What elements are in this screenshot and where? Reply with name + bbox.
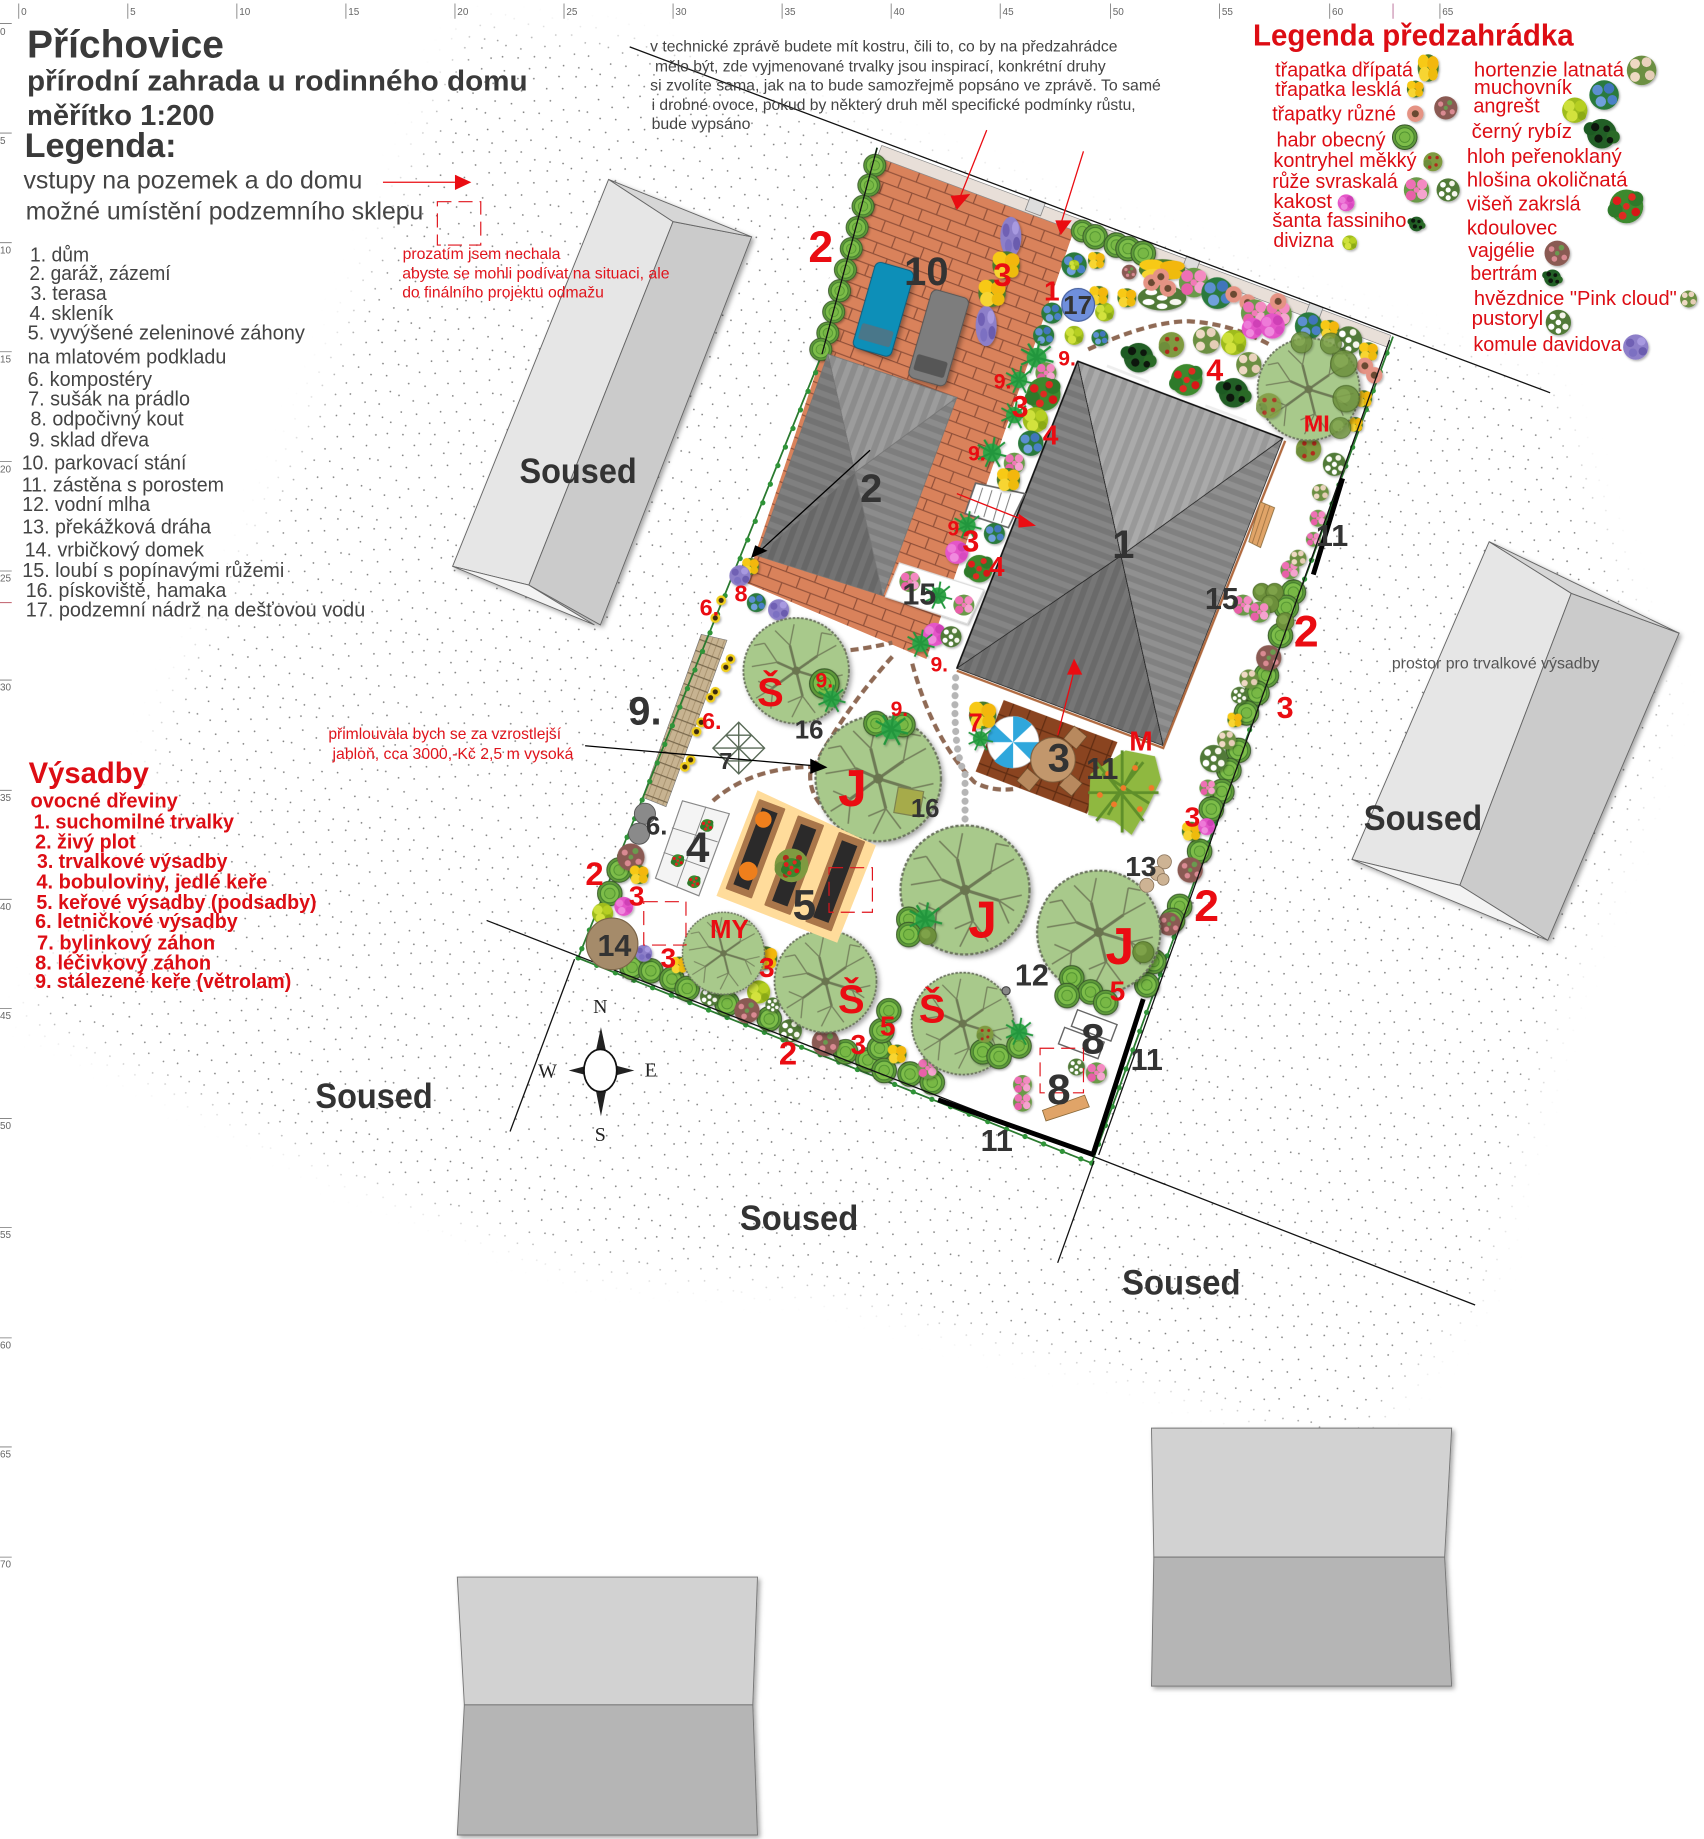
front garden planting: [1117, 259, 1382, 432]
neighbour building: upper left: [453, 179, 752, 625]
front garden legend: left column: růže svraskalá: [1272, 170, 1398, 193]
ruler: top: 20: [457, 7, 469, 18]
red note about cellar: abyste se mohli podívat na situaci, ale: [402, 265, 670, 282]
cars: [852, 261, 970, 387]
vegetable area mulch: [716, 790, 876, 943]
plan numbers: red: 3: [759, 952, 775, 983]
ruler: left: 0: [0, 27, 6, 38]
front garden legend: right column: bertrám: [1470, 262, 1537, 285]
plan numbers: dark: [597, 250, 1348, 1158]
terrace umbrella: [987, 716, 1039, 768]
plan numbers: dark: 3: [1048, 737, 1070, 781]
planting list: 5. keřové výsadby (podsadby): [36, 891, 317, 914]
red note about apple tree: jabloň, cca 3000,-Kč 2,5 m vysoká: [332, 746, 574, 763]
front garden legend: right column: pustoryl: [1472, 307, 1543, 330]
plan numbers: red: Š: [757, 669, 784, 715]
planting list: 8. léčivkový záhon: [35, 952, 211, 975]
plan numbers: dark: 9.: [628, 690, 662, 734]
stippled surroundings: [22, 14, 1674, 1428]
ruler: top: 50: [1113, 7, 1124, 18]
shrubs under trees: [810, 669, 1154, 1069]
front garden legend: left column: kontryhel měkký: [1273, 149, 1417, 172]
plan numbers: dark: 12: [1015, 959, 1049, 993]
front garden legend: left column: třapatka lesklá: [1275, 78, 1402, 101]
legend heading: Legenda:: [25, 127, 176, 165]
plan numbers: dark: 17: [1063, 292, 1092, 320]
neighbour labels: Soused: [1122, 1263, 1241, 1302]
plan numbers: red: 3: [962, 525, 979, 559]
fruit trees: [682, 338, 1360, 1075]
plan numbers: red: Š: [919, 986, 946, 1032]
plan numbers: red: 5: [880, 1010, 895, 1041]
plan numbers: red: 9: [947, 517, 959, 540]
plot ground: [578, 145, 1393, 1163]
water mist: [1002, 987, 1010, 995]
red entrance arrows: [383, 130, 1083, 735]
note about technical report: [650, 39, 1161, 133]
ruler: left: 60: [0, 1340, 12, 1351]
note about technical report: si zvolíte sama, jak na to bude samozřejmě popsáno ve zprávě. To samé: [650, 77, 1161, 94]
black pointer arrows: [585, 450, 870, 774]
plan numbers: red: 9.: [1058, 347, 1076, 370]
neighbour labels: Soused: [315, 1077, 433, 1116]
plan numbers: red: MY: [710, 916, 749, 944]
plan numbers: dark: 14: [597, 929, 631, 963]
front garden legend: left column: [1272, 59, 1417, 252]
neighbour building: bottom right: [1151, 1428, 1452, 1686]
note about technical report: v technické zprávě budete mít kostru, čili to, co by na předzahrádce: [650, 39, 1118, 56]
ruler: left: 30: [0, 683, 12, 694]
street wall: [877, 145, 1391, 347]
plan numbers: red: 2: [1294, 607, 1319, 656]
note about technical report: bude vypsáno: [652, 116, 751, 133]
plan numbers: dark: 2: [860, 467, 882, 511]
plan numbers: dark: 5: [793, 882, 816, 929]
numbered list: 13. překážková dráha: [22, 515, 212, 538]
house roof: [957, 361, 1285, 748]
plan numbers: red: 9.: [816, 670, 833, 693]
numbered list: 14. vrbičkový domek: [25, 538, 205, 561]
red note about cellar: do finálního projektu odmažu: [402, 285, 604, 302]
planting list: 2. živý plot: [35, 830, 136, 853]
ruler: top: 35: [784, 7, 796, 18]
note about perennial planting: prostor pro trvalkové výsadby: [1392, 655, 1599, 672]
front garden legend: left column: habr obecný: [1276, 129, 1386, 152]
numbered list: 5. vyvýšené zeleninové záhony: [28, 322, 306, 345]
plan numbers: red: 9.: [968, 442, 986, 465]
plan numbers: red: M: [1129, 726, 1153, 757]
neighbour labels: Soused: [1364, 799, 1482, 838]
note about technical report: i drobné ovoce, pokud by některý druh měl specifické podmínky růstu,: [652, 96, 1136, 114]
neighbour labels: Soused: [740, 1199, 858, 1238]
planting list: 7. bylinkový záhon: [37, 932, 215, 955]
front garden legend: left column: divizna: [1273, 229, 1334, 252]
pergola with roses: [885, 563, 1270, 624]
plan numbers: red: 3: [851, 1029, 866, 1060]
ruler: left: 70: [0, 1560, 12, 1571]
ruler: left: 55: [0, 1230, 12, 1241]
ruler: left: 5: [0, 136, 6, 147]
plan numbers: red: 1: [1044, 275, 1060, 306]
numbered list: 7. sušák na prádlo: [28, 388, 190, 411]
compass rose: W: [538, 1061, 557, 1083]
plan numbers: dark: 15: [902, 577, 936, 611]
planting list: 3. trvalkové výsadby: [37, 850, 228, 873]
front garden legend: plant icons: [1338, 54, 1697, 360]
numbered list: 2. garáž, zázemí: [29, 262, 171, 285]
front garden legend: right column: angrešt: [1473, 95, 1540, 118]
numbered list: 9. sklad dřeva: [29, 428, 149, 451]
fence posts: [578, 337, 1393, 1163]
plan numbers: red: J: [838, 759, 867, 817]
roof windows: [1107, 366, 1246, 421]
plan numbers: red: 3: [661, 942, 676, 973]
plan numbers: dark: 8: [1047, 1066, 1071, 1113]
ruler: top: 15: [348, 7, 360, 18]
plan numbers: dark: 11: [1131, 1043, 1163, 1077]
plan numbers: red: 9.: [994, 371, 1011, 394]
ruler: left: 15: [0, 354, 12, 365]
numbered list: na mlatovém podkladu: [28, 345, 226, 368]
planting list: ovocné dřeviny: [30, 789, 178, 812]
plan numbers: dark: 1: [1112, 523, 1134, 567]
ruler: left: 50: [0, 1121, 12, 1132]
planting over the rowan tree: [1256, 332, 1359, 439]
planting list: 4. bobuloviny, jedlé keře: [36, 870, 267, 893]
screens with climbers: [938, 478, 1343, 1155]
front garden legend: left column: třapatky různé: [1272, 103, 1396, 126]
compost bins: [629, 803, 655, 844]
ruler: top: [19, 4, 1454, 19]
neighbour labels: Soused: [519, 452, 637, 491]
compass rose: E: [645, 1060, 657, 1082]
ruler: top: 5: [130, 7, 136, 18]
small herb and medicinal beds: [680, 558, 996, 772]
plan numbers: dark: 10: [904, 250, 949, 294]
obstacle course logs: [1140, 855, 1171, 892]
ruler: left: 35: [0, 793, 12, 804]
red note about cellar: [402, 246, 670, 302]
border planting: [592, 436, 1346, 1112]
front garden legend: right column: hlošina okoličnatá: [1467, 168, 1628, 191]
front garden legend: right column: hloh peřenoklaný: [1467, 145, 1622, 168]
numbered list: 4. skleník: [29, 302, 114, 325]
note about technical report: mělo být, zde vyjmenované trvalky jsou inspirací, konkrétní druhy: [655, 59, 1106, 76]
front garden legend: right column: hortenzie latnatá: [1474, 59, 1625, 82]
numbered list: 15. loubí s popínavými růžemi: [22, 559, 284, 582]
ruler: top: 10: [239, 7, 251, 18]
compass rose: [538, 996, 657, 1146]
boundary lines: [487, 47, 1550, 1305]
terrace table and chairs: [1017, 726, 1087, 796]
dashed cellar placements: [437, 202, 1083, 1093]
plan numbers: red: 6.: [700, 594, 719, 620]
plan numbers: red: 2: [779, 1034, 797, 1071]
ruler: top: 55: [1222, 7, 1233, 18]
title: [27, 23, 528, 132]
numbered list: 11. zástěna s porostem: [22, 473, 224, 496]
plan numbers: dark: 16: [911, 795, 940, 823]
plan numbers: red: 3: [1277, 691, 1294, 725]
front garden legend: left column: třapatka dřípatá: [1275, 59, 1414, 82]
bed along the house: [908, 341, 1060, 657]
numbered list: 10. parkovací stání: [22, 452, 187, 475]
plan numbers: red: 3: [993, 256, 1012, 293]
front garden legend heading: Legenda předzahrádka: [1253, 19, 1575, 53]
plan numbers: red: J: [968, 890, 997, 948]
front garden legend: right column: vajgélie: [1468, 239, 1535, 262]
plan numbers: dark: 13: [1125, 851, 1157, 882]
hedges: [597, 154, 1306, 1095]
fences: [578, 148, 1393, 1163]
paths: [713, 321, 1270, 814]
entrance steps: [965, 483, 1025, 528]
numbered list: [22, 244, 365, 621]
neighbour building: right: [1352, 542, 1679, 940]
title: Příchovice: [27, 23, 224, 66]
plan numbers: red: 6.: [702, 708, 722, 734]
legend: entrances and cellar: vstupy na pozemek a do domu: [23, 167, 362, 194]
plan numbers: red: Š: [838, 976, 865, 1022]
front garden legend: left column: kakost: [1273, 190, 1332, 213]
greenhouse: [655, 801, 729, 896]
front garden legend: right column: višeň zakrslá: [1467, 192, 1581, 215]
plan numbers: red: 4: [1043, 420, 1059, 451]
numbered list: 3. terasa: [30, 282, 107, 305]
ruler: top: 60: [1332, 7, 1344, 18]
plan numbers: red: 9.: [891, 698, 908, 721]
front garden legend: right column: černý rybíz: [1472, 120, 1572, 143]
plan numbers: dark: 11: [981, 1124, 1013, 1158]
ruler: left: 10: [0, 245, 12, 256]
plan numbers: red: 2: [808, 223, 833, 272]
plan numbers: red: 4: [1206, 354, 1223, 388]
bench: [1042, 1095, 1089, 1121]
plan numbers: dark: 11: [1316, 519, 1348, 553]
front garden legend: right column: kdoulovec: [1467, 217, 1557, 240]
clothes dryer: [713, 722, 765, 774]
ruler: top: 0: [21, 7, 27, 18]
pebbles path: [955, 678, 965, 821]
title: měřítko 1:200: [27, 100, 215, 132]
planting list: 6. letničkové výsadby: [35, 910, 238, 933]
wood stack: [643, 634, 727, 807]
front garden legend: right column: muchovník: [1474, 76, 1573, 99]
plan numbers: red: 3: [1012, 390, 1029, 424]
plan numbers: red: 3: [629, 880, 645, 911]
plan numbers: red: 5: [1110, 975, 1125, 1006]
red note about cellar: prozatím jsem nechala: [403, 246, 561, 263]
plan numbers: red: 9.: [930, 653, 948, 676]
ruler: left: 65: [0, 1449, 12, 1460]
compass rose: S: [595, 1124, 606, 1146]
planting list: [30, 789, 317, 993]
front garden legend: right column: komule davidova: [1473, 333, 1622, 356]
neighbour labels: [315, 452, 1482, 1302]
planting list: 9. stálezené keře (větrolam): [35, 970, 291, 993]
plan numbers: red: 7: [968, 709, 983, 737]
numbered list: 16. pískoviště, hamaka: [26, 579, 227, 602]
raised vegetable beds: [725, 799, 865, 932]
numbered list: 1. dům: [30, 244, 89, 267]
plan numbers: red: 8: [735, 580, 748, 606]
numbered list: 12. vodní mlha: [22, 493, 151, 516]
planting heading: Výsadby: [29, 757, 150, 790]
brick paving: [746, 156, 1074, 659]
plan numbers: dark: 15: [1205, 582, 1239, 616]
plan numbers: dark: 16: [795, 716, 823, 744]
plan numbers: red: J: [1105, 917, 1134, 975]
ruler: top: 40: [894, 7, 905, 18]
ruler: top: 65: [1442, 7, 1454, 18]
plan numbers: dark: 11: [1086, 752, 1118, 786]
front garden legend: right column: [1467, 59, 1677, 356]
ruler: left: [0, 23, 12, 1571]
plan numbers: red: MI: [1304, 410, 1330, 436]
sandbox: [894, 787, 924, 817]
garage roof: [757, 354, 957, 596]
plan numbers: red: [585, 223, 1330, 1071]
plan numbers: red: 4: [989, 551, 1005, 582]
orange climbing plant: [1088, 750, 1161, 835]
legend: entrances and cellar: [23, 167, 423, 225]
plan numbers: red: 3: [1185, 802, 1200, 833]
plan numbers: dark: 7: [719, 748, 732, 774]
numbered list: 6. kompostéry: [28, 368, 153, 391]
ruler: left: 45: [0, 1011, 12, 1022]
ruler: top: 30: [675, 7, 687, 18]
icon: rain water tank: [1062, 288, 1095, 321]
terrace paving: [976, 700, 1117, 814]
neighbour building: bottom left: [457, 1577, 757, 1835]
seating area tables: [1058, 1010, 1117, 1059]
bench by the house: [1249, 502, 1275, 548]
front garden legend: left column: šanta fassiniho: [1272, 209, 1406, 232]
willow house: [586, 918, 638, 970]
ruler: top: 25: [566, 7, 578, 18]
legend: entrances and cellar: možné umístění podzemního sklepu: [26, 198, 423, 225]
compass rose: N: [593, 996, 608, 1018]
title: přírodní zahrada u rodinného domu: [27, 65, 528, 97]
plan numbers: dark: 8: [1081, 1015, 1105, 1062]
ruler: left: 20: [0, 465, 12, 476]
plan numbers: red: 2: [585, 855, 604, 892]
ruler: left: 25: [0, 574, 12, 585]
numbered list: 8. odpočivný kout: [30, 408, 184, 431]
plan numbers: dark: 6.: [646, 813, 667, 841]
planting list: 1. suchomilné trvalky: [34, 810, 234, 833]
driveway plants: [976, 217, 1021, 346]
front garden legend: right column: hvězdnice "Pink cloud": [1474, 287, 1677, 310]
ruler: top: 45: [1003, 7, 1014, 18]
red note about apple tree: [328, 726, 574, 763]
red note about apple tree: přimlouvala bych se za vzrostlejší: [328, 726, 562, 743]
plan numbers: red: 2: [1194, 882, 1219, 931]
rain tank planting: [1033, 252, 1114, 346]
numbered list: 17. podzemní nádrž na dešťovou vodu: [26, 598, 365, 621]
ruler: left: 40: [0, 902, 12, 913]
plan numbers: dark: 4: [686, 824, 710, 871]
